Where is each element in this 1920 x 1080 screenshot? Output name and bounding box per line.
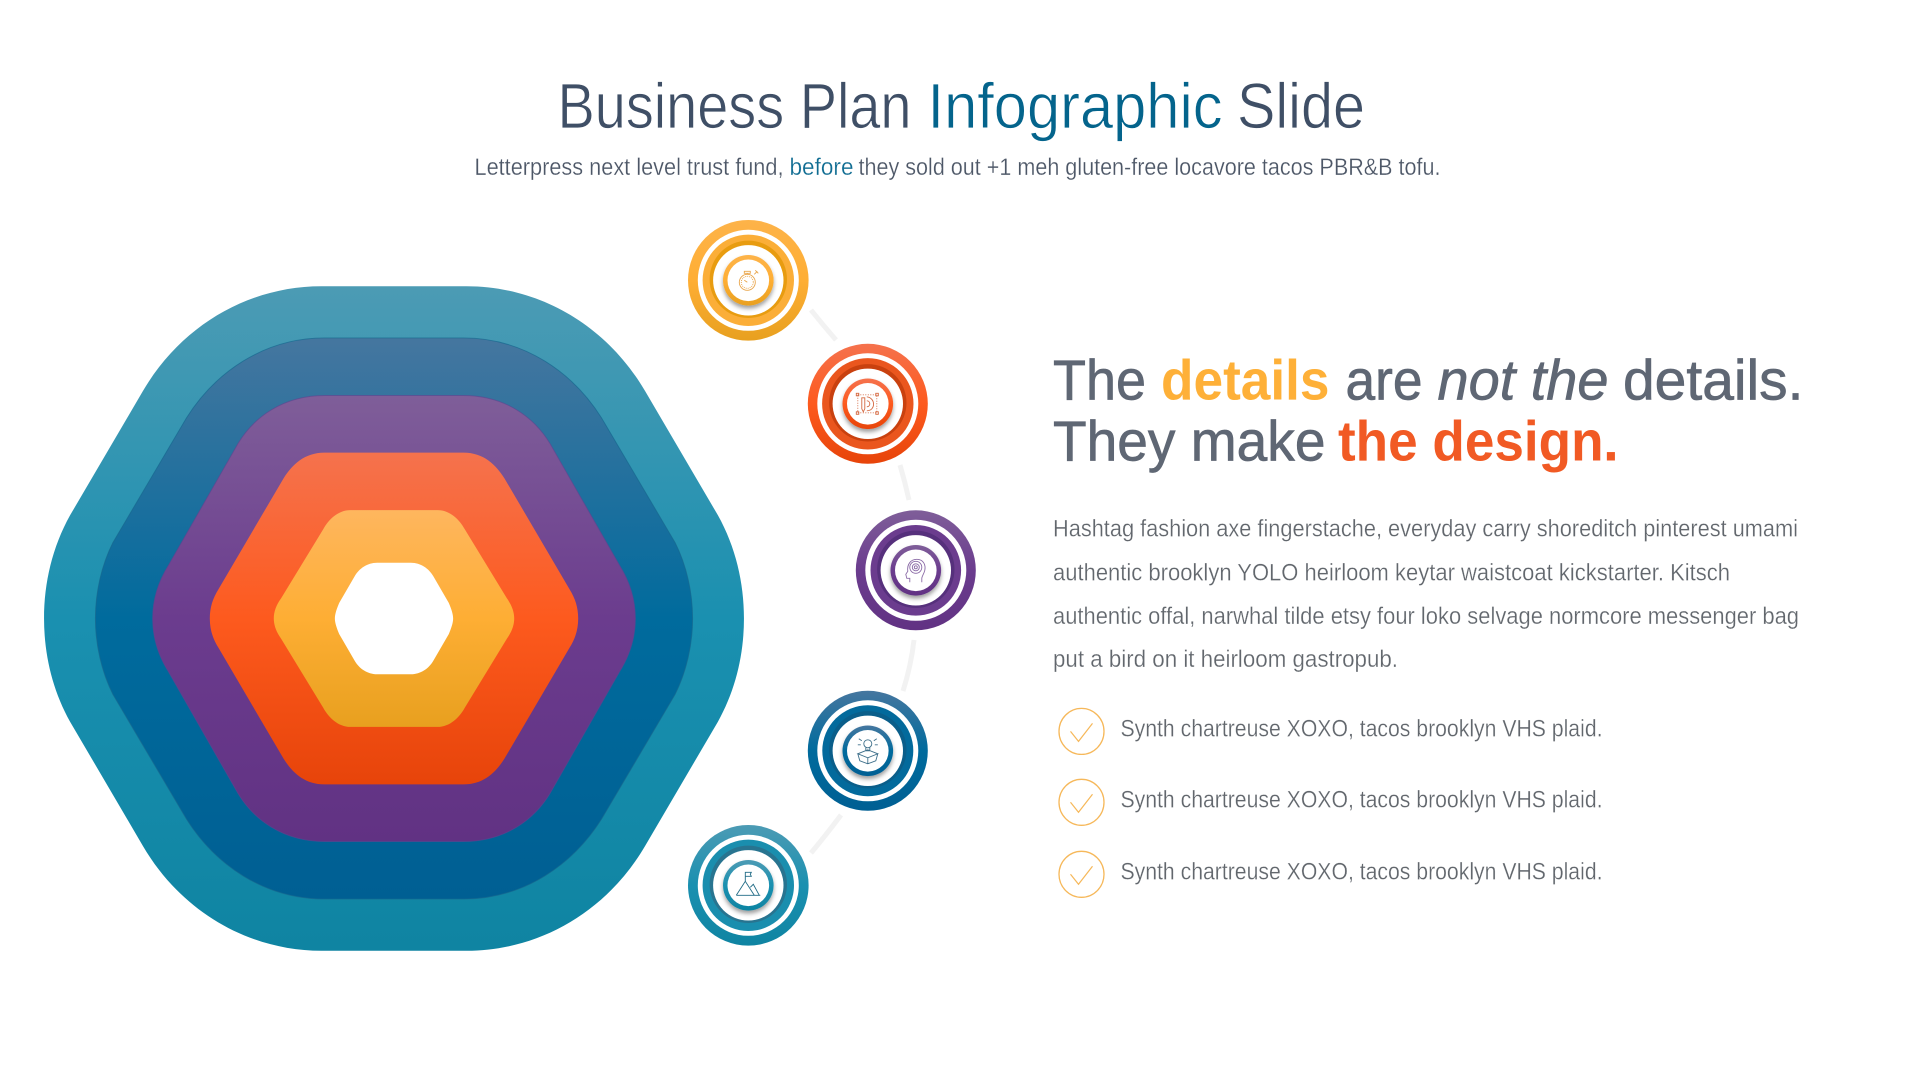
hexagon layer 1: teal bbox=[44, 286, 744, 951]
icon: box with light bulb bbox=[858, 739, 878, 764]
heading: . bbox=[1603, 410, 1619, 474]
subtitle: they sold out +1 meh gluten-free locavore tacos PBR&B tofu. bbox=[858, 154, 1440, 181]
hexagon layer 3: purple bbox=[153, 396, 635, 842]
heading: The bbox=[1053, 348, 1146, 412]
title: Infographic bbox=[928, 70, 1222, 142]
list item 1: Synth chartreuse XOXO, tacos brooklyn VHS plaid. bbox=[1120, 715, 1602, 742]
list item 1 bbox=[1059, 708, 1602, 754]
icon: mountain with flag bbox=[736, 872, 760, 895]
circle 1: yellow stopwatch bbox=[688, 220, 809, 341]
heading bbox=[1053, 348, 1804, 474]
icon: head with maze bbox=[906, 559, 925, 582]
hexagon layer 4: orange bbox=[210, 453, 578, 784]
heading: the design bbox=[1338, 410, 1604, 474]
heading: are bbox=[1346, 348, 1422, 412]
title: Slide bbox=[1237, 70, 1365, 142]
list item 3 bbox=[1059, 851, 1602, 897]
circle 4: blue box with bulb bbox=[808, 691, 928, 811]
body paragraph: authentic brooklyn YOLO heirloom keytar waistcoat kickstarter. Kitsch bbox=[1053, 560, 1730, 586]
icon: stopwatch bbox=[739, 270, 758, 290]
title: Business Plan bbox=[558, 70, 912, 142]
nested hexagon diagram bbox=[44, 286, 744, 951]
subtitle bbox=[474, 154, 1440, 181]
heading: details. bbox=[1623, 348, 1804, 412]
heading: They make bbox=[1053, 410, 1326, 474]
list item 2: Synth chartreuse XOXO, tacos brooklyn VHS plaid. bbox=[1120, 786, 1602, 813]
heading: details bbox=[1161, 348, 1330, 412]
body paragraph: authentic offal, narwhal tilde etsy four loko selvage normcore messenger bag bbox=[1053, 603, 1799, 630]
check list bbox=[1059, 708, 1602, 897]
title bbox=[558, 70, 1365, 142]
icon: pen and bounding box bbox=[856, 393, 878, 414]
body paragraph bbox=[1053, 516, 1799, 673]
hexagon layer 2: blue bbox=[95, 338, 693, 899]
list item 3: Synth chartreuse XOXO, tacos brooklyn VHS plaid. bbox=[1120, 858, 1602, 885]
list item 2 bbox=[1059, 779, 1602, 825]
circle 3: purple head bbox=[856, 510, 976, 630]
hexagon centre: white bbox=[335, 563, 453, 674]
body paragraph: Hashtag fashion axe fingerstache, everyday carry shoreditch pinterest umami bbox=[1053, 516, 1798, 542]
hexagon layer 5: yellow bbox=[274, 510, 514, 727]
circle 2: orange design tool bbox=[808, 344, 928, 464]
subtitle: before bbox=[790, 154, 854, 181]
circle 5: teal mountain flag bbox=[688, 825, 809, 946]
subtitle: Letterpress next level trust fund, bbox=[474, 154, 784, 181]
connector lines between circles bbox=[811, 310, 914, 853]
body paragraph: put a bird on it heirloom gastropub. bbox=[1053, 646, 1398, 673]
heading: not the bbox=[1438, 348, 1608, 412]
